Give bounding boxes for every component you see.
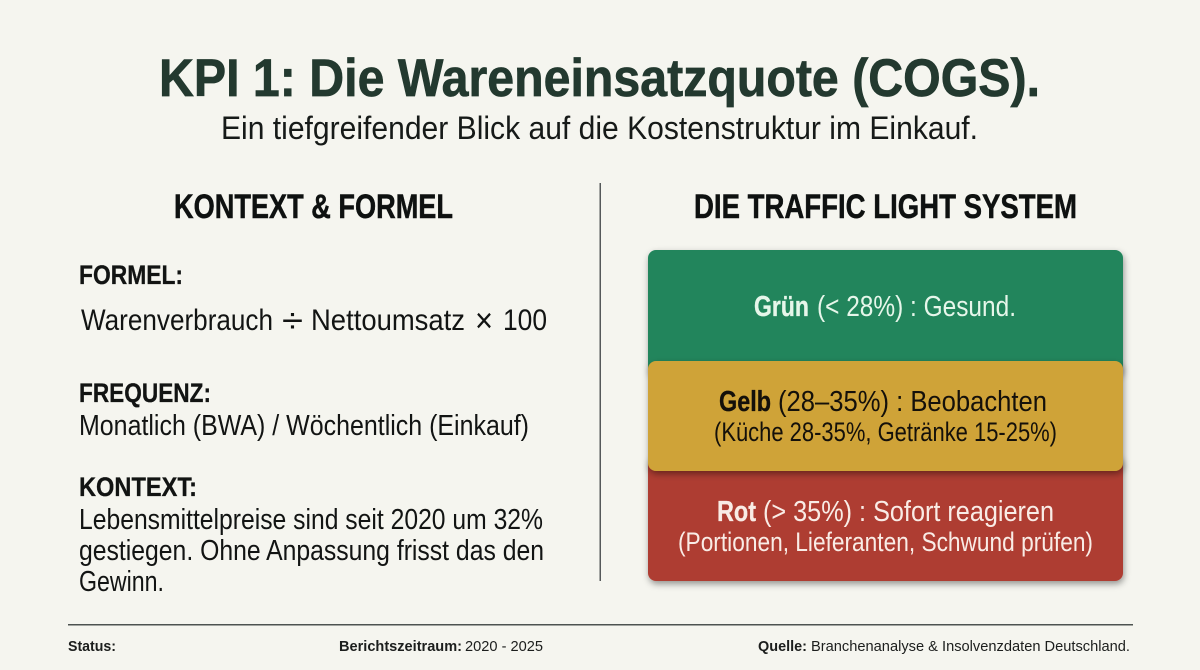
panel: traffic light red: [648, 455, 1123, 581]
red label: (> 35%) : Sofort reagieren: [763, 496, 1054, 528]
footer rule: [68, 624, 1133, 626]
red label: (Portionen, Lieferanten, Schwund prüfen): [678, 527, 1093, 557]
panel: traffic light yellow: [648, 361, 1123, 471]
red label: Rot: [717, 496, 756, 528]
context text: Lebensmittelpreise sind seit 2020 um 32%: [79, 504, 543, 536]
formula text: 100: [503, 304, 547, 337]
panel: context: [79, 472, 544, 598]
green label: [754, 291, 1016, 323]
footer source: Branchenanalyse & Insolvenzdaten Deutschland.: [811, 638, 1130, 655]
footer period: 2020 - 2025: [465, 638, 543, 655]
panel: frequency: [79, 378, 529, 442]
frequency text: Monatlich (BWA) / Wöchentlich (Einkauf): [79, 410, 529, 442]
panel: traffic light green: [648, 250, 1123, 375]
yellow label: Gelb: [719, 386, 771, 418]
yellow label: (Küche 28-35%, Getränke 15-25%): [714, 417, 1057, 447]
left column heading: KONTEXT & FORMEL: [174, 188, 453, 226]
formula text: ×: [475, 302, 493, 340]
context text: [79, 504, 544, 598]
footer status: Status:: [68, 638, 116, 655]
footer source: Quelle:: [758, 638, 807, 655]
footer period: Berichtszeitraum:: [339, 638, 462, 655]
formula text: [81, 302, 547, 340]
footer: [68, 638, 1130, 655]
right column heading: DIE TRAFFIC LIGHT SYSTEM: [694, 188, 1077, 226]
formula label: FORMEL:: [79, 260, 183, 290]
frequency label: FREQUENZ:: [79, 378, 211, 408]
context label: KONTEXT:: [79, 472, 197, 502]
yellow label: [714, 386, 1057, 447]
formula text: Warenverbrauch: [81, 304, 273, 337]
footer period: [339, 638, 543, 655]
green label: (< 28%) : Gesund.: [817, 291, 1016, 323]
column divider: [600, 183, 601, 581]
green label: Grün: [754, 291, 809, 323]
subtitle: Ein tiefgreifender Blick auf die Kostenstruktur im Einkauf.: [221, 110, 978, 146]
context text: Gewinn.: [79, 566, 164, 598]
yellow label: (28–35%) : Beobachten: [778, 386, 1047, 418]
title: KPI 1: Die Wareneinsatzquote (COGS).: [159, 49, 1040, 108]
formula text: ÷: [282, 302, 303, 340]
context text: gestiegen. Ohne Anpassung frisst das den: [79, 535, 544, 567]
red label: [678, 496, 1093, 557]
panel: formula: [79, 260, 547, 340]
formula text: Nettoumsatz: [311, 304, 465, 337]
